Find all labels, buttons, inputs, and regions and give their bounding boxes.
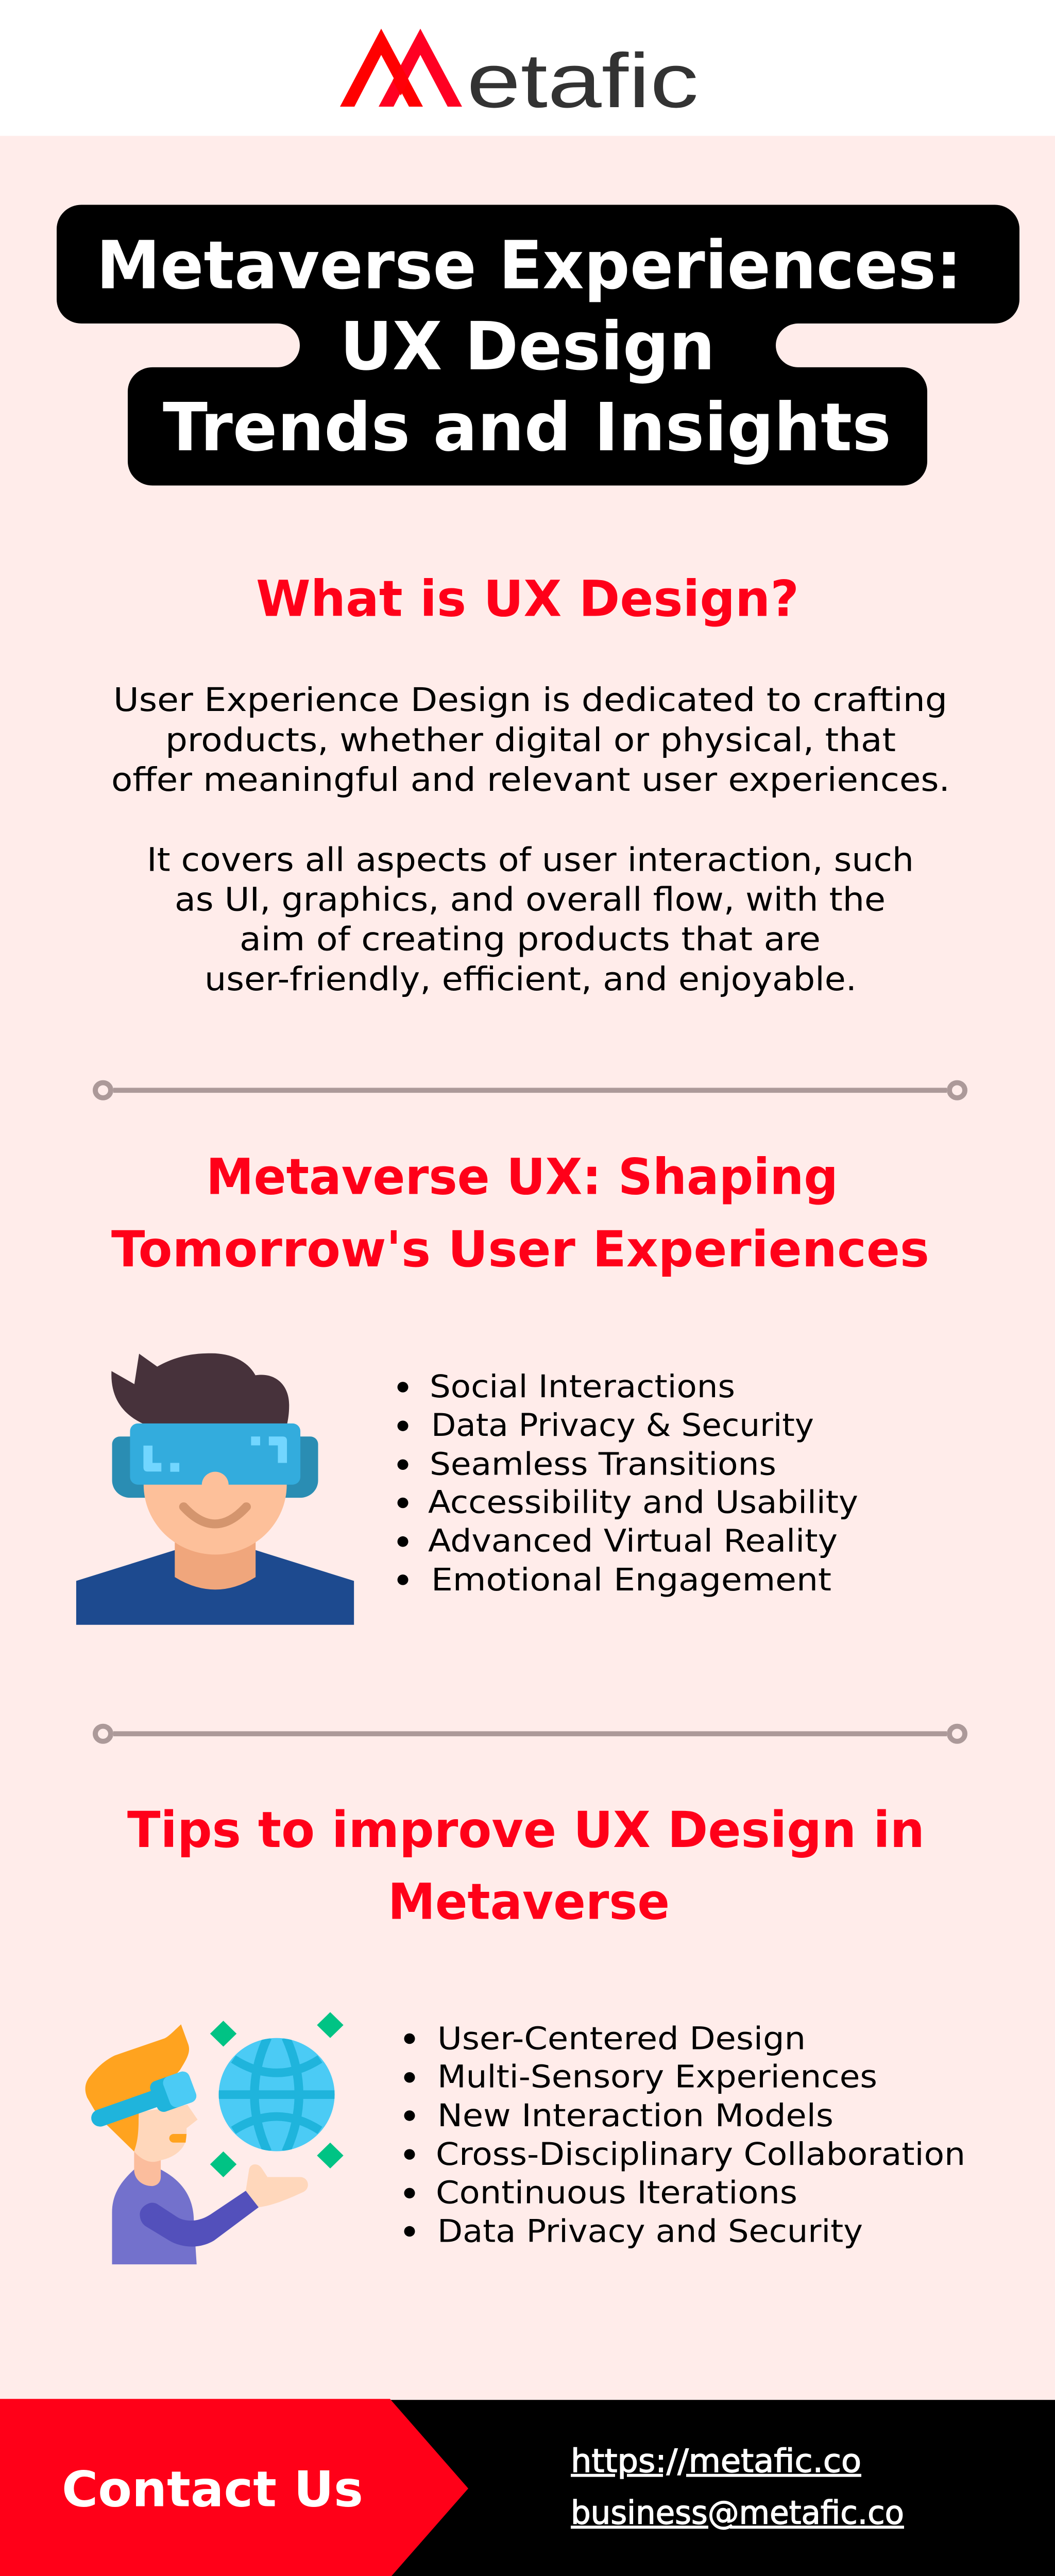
email link: business@metafic.co (571, 2494, 904, 2531)
heading: Tips to improve UX Design in Metaverse: Tips to improve UX Design in (127, 1801, 925, 1859)
icon: man wearing VR headset (76, 1353, 354, 1625)
logo: Metafic (340, 29, 699, 124)
bullet list: tips: Multi-Sensory Experiences (437, 2059, 877, 2095)
bullet list: tips: User-Centered Design (437, 2021, 806, 2057)
bullet list: Metaverse UX topics: Emotional Engagement (431, 1562, 831, 1598)
paragraph: definition of UX design: It covers all aspects of user interaction, such (147, 841, 914, 879)
bullet list: tips: Continuous Iterations (436, 2175, 797, 2211)
icon: person in VR headset with globe (86, 2012, 344, 2264)
bullet list: Metaverse UX topics: Social Interactions (430, 1369, 735, 1405)
title banner (57, 205, 1019, 485)
title banner: Trends and Insights (163, 388, 891, 466)
bullet list: tips: New Interaction Models (437, 2098, 833, 2134)
title banner: Metaverse Experiences: (96, 227, 962, 304)
footer contact band (0, 2399, 1055, 2576)
heading: Metaverse UX: Tomorrow's User Experiences (111, 1221, 929, 1279)
logo: Metafic: etafic (467, 38, 699, 124)
heading: Metaverse UX (111, 1148, 929, 1279)
title banner: UX Design (340, 308, 715, 385)
website link: https://metafic.co (571, 2442, 861, 2480)
bullet list: Metaverse UX topics (398, 1369, 858, 1598)
paragraph: definition of UX design: aim of creating products that are (240, 920, 821, 959)
bullet list: tips (404, 2021, 965, 2249)
paragraph: definition of UX design: offer meaningful and relevant user experiences. (111, 761, 950, 799)
footer arrow: Contact Us: Contact Us (62, 2460, 363, 2518)
paragraph: definition of UX design: User Experience Design is dedicated to crafting (113, 681, 947, 719)
bullet list: tips: Data Privacy and Security (437, 2213, 863, 2249)
heading: Tips to improve UX Design in Metaverse: Metaverse (388, 1873, 670, 1931)
heading: Tips to improve UX Design in Metaverse (127, 1801, 925, 1931)
paragraph: definition of UX design: user-friendly, efficient, and enjoyable. (205, 960, 857, 998)
heading: What is UX Design?: What is UX Design? (256, 570, 799, 628)
paragraph: definition of UX design (111, 681, 950, 998)
bullet list: Metaverse UX topics: Data Privacy & Security (431, 1408, 814, 1444)
footer arrow: Contact Us (0, 2399, 468, 2576)
bullet list: Metaverse UX topics: Seamless Transitions (430, 1446, 776, 1482)
heading: Metaverse UX: Metaverse UX: Shaping (206, 1148, 838, 1206)
paragraph: definition of UX design: products, whether digital or physical, that (165, 721, 896, 759)
header band with logo (0, 0, 1055, 136)
bullet list: tips: Cross-Disciplinary Collaboration (436, 2137, 965, 2173)
bullet list: Metaverse UX topics: Advanced Virtual Reality (428, 1523, 838, 1560)
paragraph: definition of UX design: as UI, graphics, and overall flow, with the (175, 880, 886, 919)
bullet list: Metaverse UX topics: Accessibility and Usability (428, 1484, 858, 1520)
